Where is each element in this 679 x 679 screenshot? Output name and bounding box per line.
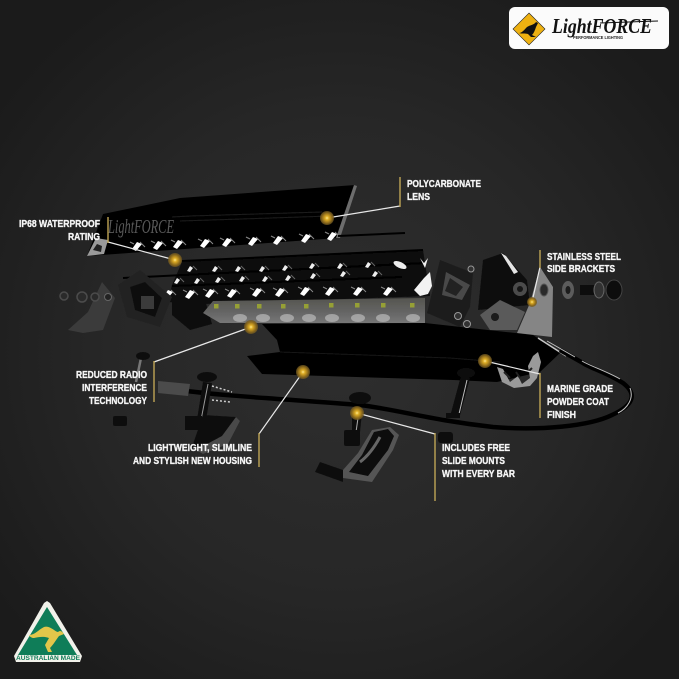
- callout: powder coat: FINISH: [547, 409, 576, 421]
- callout: slide mounts: [350, 406, 515, 501]
- cable: [180, 350, 632, 428]
- badge: Australian Made: [14, 601, 82, 662]
- callout: stainless steel brackets: [527, 250, 621, 307]
- black housing: [247, 323, 566, 388]
- right mount bolt: [446, 368, 475, 418]
- cable terminal plate: [158, 381, 190, 396]
- polycarbonate lens panel: [87, 185, 357, 256]
- LED rows: [161, 258, 432, 299]
- small nut: [113, 416, 127, 426]
- stainless side bracket: [478, 253, 553, 337]
- left end cap and bracket: [68, 270, 172, 333]
- callout: polycarbonate lens: [320, 177, 481, 225]
- callout: powder coat: MARINE GRADE: [547, 383, 613, 395]
- callout: IP68 rating: [19, 217, 182, 267]
- long rods: [123, 233, 425, 286]
- LED board: [168, 250, 430, 304]
- left mount bolt: [185, 372, 232, 430]
- icon: gold kangaroo: [29, 627, 64, 652]
- exploded light bar product: [60, 185, 632, 482]
- icon: kangaroo road sign: [513, 13, 545, 45]
- callout: slide mounts: WITH EVERY BAR: [442, 468, 515, 480]
- small right nut: [438, 432, 453, 443]
- callout: stainless steel brackets: SIDE BRACKETS: [547, 263, 615, 275]
- cable highlight: [547, 341, 631, 413]
- callout: housing: LIGHTWEIGHT, SLIMLINE: [148, 442, 252, 454]
- logo: LightFORCE: LightFORCE: [551, 14, 652, 38]
- band highlights: [233, 314, 420, 322]
- left small bolt: [136, 352, 150, 382]
- callout: polycarbonate lens: LENS: [407, 191, 430, 203]
- callout: radio interference: REDUCED RADIO: [76, 369, 147, 381]
- callout: radio interference: TECHNOLOGY: [89, 395, 147, 407]
- callout: radio interference: INTERFERENCE: [82, 382, 147, 394]
- callout: powder coat: [478, 354, 613, 421]
- callout: powder coat: POWDER COAT: [547, 396, 609, 408]
- polycarbonate lens panel: LightFORCE: [107, 216, 174, 238]
- badge: Australian Made: AUSTRALIAN MADE: [16, 655, 81, 662]
- callout: slide mounts: SLIDE MOUNTS: [442, 455, 505, 467]
- logo: LightFORCE: PERFORMANCE LIGHTING: [573, 35, 623, 40]
- left clamp: [192, 415, 240, 454]
- callout: polycarbonate lens: POLYCARBONATE: [407, 178, 481, 190]
- callout: slide mounts: INCLUDES FREE: [442, 442, 510, 454]
- callout: housing: [133, 365, 310, 467]
- logo swoosh: [600, 21, 658, 23]
- green LEDs: [214, 303, 414, 308]
- centre mount bolt: [344, 392, 371, 446]
- lens LEDs: [130, 232, 340, 251]
- callout: IP68 rating: IP68 WATERPROOF: [19, 218, 100, 230]
- callout: IP68 rating: RATING: [68, 231, 100, 243]
- callout: housing: AND STYLISH NEW HOUSING: [133, 455, 252, 467]
- reflector band: [203, 298, 425, 323]
- callout: stainless steel brackets: STAINLESS STEEL: [547, 251, 621, 263]
- logo: LightFORCE: [509, 7, 669, 49]
- right end cap: [427, 260, 474, 328]
- right washer and bolt: [562, 280, 622, 300]
- centre clamp: [315, 427, 399, 482]
- callout: radio interference: [76, 320, 258, 407]
- band end shadow: [172, 300, 212, 330]
- left washers: [60, 292, 99, 302]
